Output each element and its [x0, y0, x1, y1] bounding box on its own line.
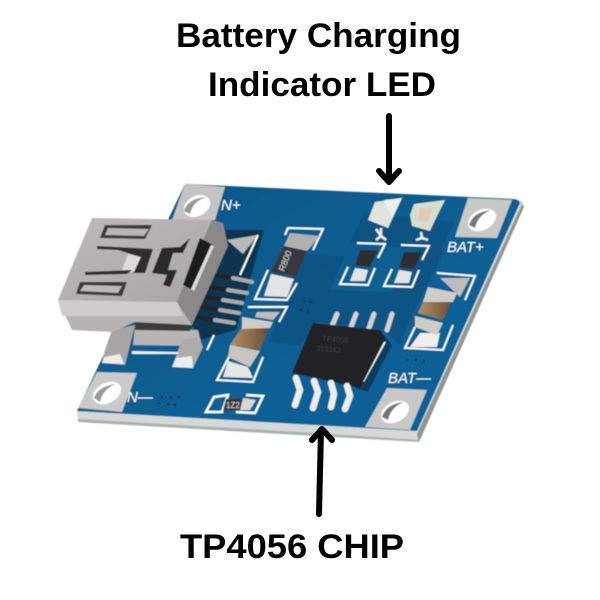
label: TP4056 chip: TP4056 CHIP	[180, 528, 404, 566]
arrow: pointing up to chip	[312, 429, 332, 514]
silkscreen labels: BAT+	[447, 239, 484, 256]
front skirt	[58, 300, 192, 332]
title: battery charging indicator LED	[176, 17, 461, 104]
mounting pad: top right	[455, 198, 512, 238]
board vias	[158, 300, 425, 406]
arrow: pointing down to LED	[379, 116, 399, 182]
resistor: bottom left: 1Z2	[226, 401, 240, 410]
blue PCB	[77, 184, 520, 431]
USB pins	[197, 275, 252, 323]
capacitor: right	[405, 273, 475, 350]
silkscreen labels	[127, 197, 484, 406]
title: battery charging indicator LED: Battery Charging	[176, 17, 461, 55]
TP4056 chip: 315162	[316, 344, 341, 355]
resistor: bottom left	[206, 395, 263, 413]
shell cutouts	[100, 225, 152, 239]
USB socket shadow and pad	[190, 230, 264, 350]
board edge	[77, 200, 524, 442]
feet	[102, 325, 135, 365]
TP4056 chip	[292, 314, 392, 409]
LED right	[410, 200, 445, 240]
LED left	[368, 198, 402, 240]
LED resistor left	[340, 243, 385, 285]
title: battery charging indicator LED: Indicator LED	[208, 66, 436, 104]
silkscreen labels: BAT—	[388, 370, 432, 387]
capacitor: left	[217, 307, 287, 382]
mounting pad: bottom right	[365, 388, 427, 430]
resistor R800	[255, 228, 323, 300]
TP4056 chip: TP4056	[322, 334, 349, 345]
silkscreen labels: N+	[221, 197, 241, 214]
top shell	[58, 218, 212, 302]
mini-USB connector	[58, 218, 228, 368]
silkscreen labels: N—	[127, 389, 154, 406]
mounting pad: bottom left	[78, 372, 137, 412]
resistor R800: R800	[277, 249, 294, 273]
mounting pad: top left	[172, 184, 225, 221]
LED resistor right	[384, 245, 429, 287]
side wall	[177, 220, 228, 325]
TP4056 module board	[58, 184, 524, 442]
copper traces	[225, 213, 455, 408]
